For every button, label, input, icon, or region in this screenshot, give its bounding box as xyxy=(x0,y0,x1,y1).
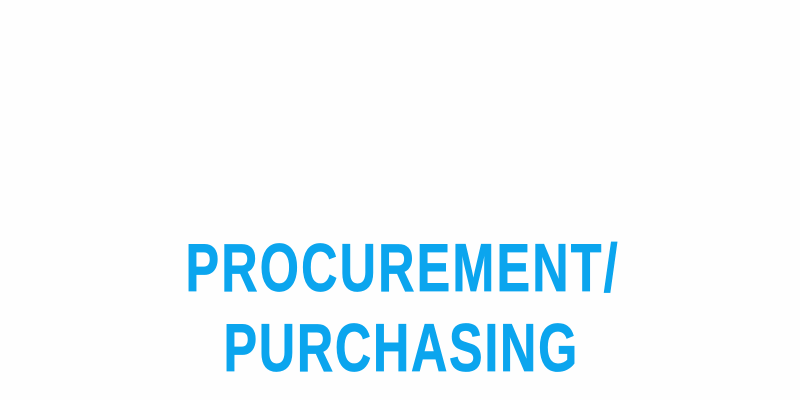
title line 2: PURCHASING xyxy=(224,310,577,386)
title xyxy=(186,230,618,386)
title line 1: PROCUREMENT/ xyxy=(186,230,618,306)
